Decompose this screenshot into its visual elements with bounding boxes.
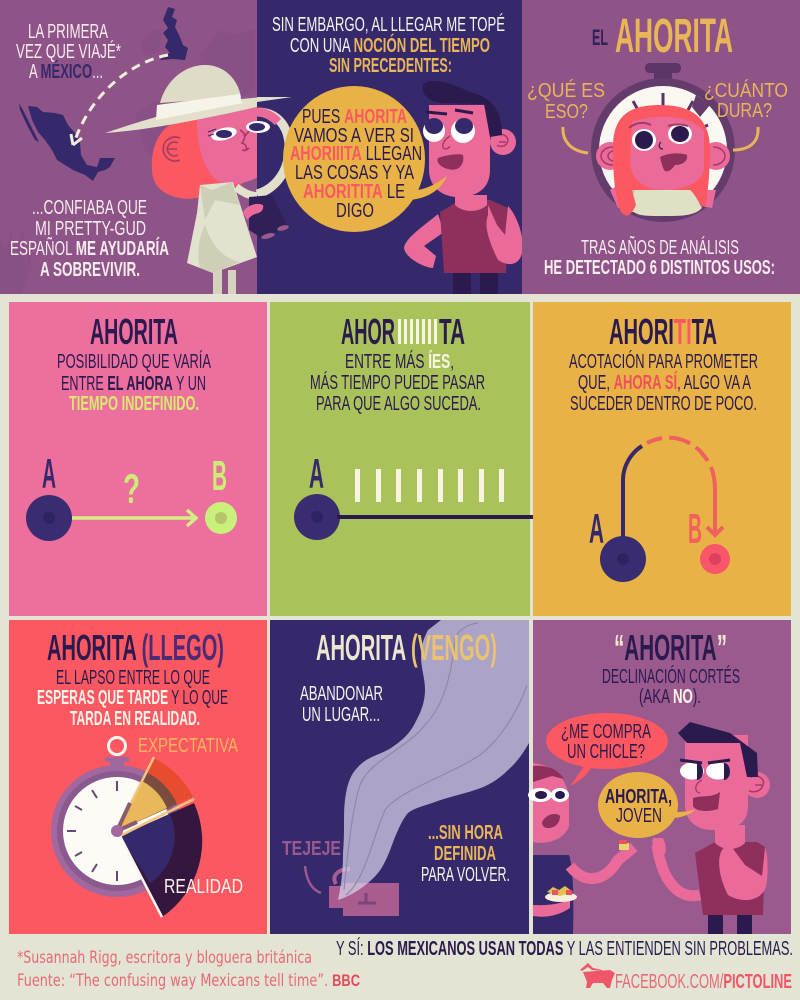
heading: AHORITITA	[609, 311, 717, 352]
text: definition	[602, 665, 740, 708]
text: definition: TARDA EN REALIDAD.	[70, 708, 200, 730]
text: definition: TIEMPO INDEFINIDO.	[69, 393, 199, 415]
diagram: loop	[589, 438, 730, 582]
panel: el ahorita	[522, 0, 800, 294]
speech bubble: PUES AHORITA	[302, 106, 407, 128]
heading: TA	[439, 311, 465, 352]
panel: first trip to Mexico	[0, 0, 292, 294]
arrow head	[71, 134, 82, 145]
title	[592, 10, 733, 63]
diagram: A to B: ?	[123, 465, 140, 512]
text: definition	[310, 350, 485, 415]
speech bubble: VAMOS A VER SI	[294, 125, 414, 147]
heading: AHOR	[341, 311, 395, 352]
panel: ahoritita	[533, 302, 791, 616]
text: questions	[527, 79, 788, 123]
panel: ahorita	[9, 302, 267, 616]
stopwatch portrait	[591, 63, 735, 222]
text: confiaba	[10, 197, 169, 281]
chart: stopwatch	[51, 738, 202, 917]
text: abandonar	[300, 683, 383, 726]
text: sin embargo: SIN PRECEDENTES:	[329, 55, 452, 77]
text: definition: MÁS TIEMPO PUEDE PASAR	[310, 371, 485, 394]
text: confiaba: MI PRETTY-GUD	[35, 218, 146, 240]
bubble strokes	[563, 127, 758, 153]
text: sin embargo	[272, 13, 505, 77]
text: sin hora	[421, 822, 510, 886]
heading: AHORITA	[90, 311, 178, 352]
text: tras años	[544, 235, 775, 279]
diagram: A to B: B	[212, 452, 227, 499]
text: sin embargo: CON UNA NOCIÓN DEL TIEMPO	[290, 33, 490, 57]
panel: sin embargo	[243, 0, 523, 294]
icon: map of Britain	[160, 7, 188, 60]
text: definition: PARA QUE ALGO SUCEDA.	[316, 393, 481, 415]
text: definition: POSIBILIDAD QUE VARÍA	[57, 350, 211, 373]
text: confiaba: A SOBREVIVIR.	[40, 259, 140, 281]
heading: AHORITA (LLEGO)	[47, 627, 224, 668]
panel: ahoriiiita	[270, 302, 533, 616]
diagram: loop: A	[589, 505, 604, 552]
panel: ahorita llego	[9, 620, 267, 934]
text: primera vez: VEZ QUE VIAJÉ*	[16, 40, 121, 63]
figure: explorer woman	[105, 65, 292, 294]
text: primera vez: LA PRIMERA	[28, 21, 108, 43]
text: primera vez	[16, 21, 121, 83]
heading: “AHORITA”	[614, 627, 727, 668]
text: abandonar: UN LUGAR...	[302, 704, 380, 726]
left character	[528, 763, 634, 934]
text: sin embargo: SIN EMBARGO, AL LLEGAR ME TOPÉ	[272, 13, 505, 36]
icon: pig logo	[580, 963, 615, 988]
title: EL	[592, 25, 608, 50]
smoke trail	[338, 620, 529, 900]
text: definition	[569, 350, 758, 415]
diagram: stretched line: A	[309, 450, 324, 497]
right character	[652, 722, 770, 934]
arrow: Britain to Mexico	[74, 55, 168, 143]
panel: ahorita vengo	[270, 620, 529, 934]
text: definition: EL LAPSO ENTRE LO QUE	[56, 667, 210, 689]
text: abandonar: ABANDONAR	[300, 683, 383, 705]
red speech bubble: ¿ME COMPRA	[561, 721, 651, 743]
diagram: A to B: A	[42, 450, 56, 497]
diagram: A to B	[26, 450, 237, 541]
icon: map of Mexico	[19, 103, 115, 181]
speech bubble: LAS COSAS Y YA	[295, 162, 414, 184]
footnote: credits	[17, 948, 360, 991]
yellow speech bubble: AHORITA,	[605, 786, 672, 808]
text: sin hora: PARA VOLVER.	[421, 864, 510, 886]
speech bubble: AHORITITA LE	[303, 181, 405, 203]
yellow speech bubble: JOVEN	[616, 805, 662, 827]
text: sin hora: ...SIN HORA	[428, 822, 503, 844]
text: definition: (AKA NO).	[639, 686, 701, 708]
text: questions: ¿QUÉ ES	[527, 79, 605, 102]
panel: declinacion cortes	[528, 620, 791, 934]
label: tejeje: TEJEJE	[282, 838, 341, 860]
stroke near suitcase	[305, 866, 321, 893]
speech bubble: AHORIIITA LLEGAN	[290, 143, 422, 165]
text: questions: DURA?	[717, 100, 772, 122]
magnifying glass and binoculars	[243, 97, 292, 240]
text: questions: ¿CUÁNTO	[704, 79, 788, 102]
suitcase	[329, 869, 399, 916]
text: confiaba: ESPAÑOL ME AYUDARÍA	[10, 236, 169, 260]
man character	[404, 81, 523, 294]
text: confiaba: ...CONFIABA QUE	[32, 197, 147, 219]
footnote: credits: *Susannah Rigg, escritora y bloguera británica	[17, 948, 312, 968]
red speech bubble	[546, 713, 668, 786]
text: definition: ENTRE EL AHORA Y UN	[61, 373, 206, 395]
text: definition: ENTRE MÁS ÍES,	[345, 350, 454, 373]
diagram: stretched line	[294, 450, 533, 540]
footnote: credits: Fuente: “The confusing way Mexicans tell time”. BBC	[17, 971, 360, 991]
text: primera vez: A MÉXICO...	[29, 60, 103, 83]
speech bubble: DIGO	[336, 200, 374, 222]
text: definition: QUE, AHORA SÍ, ALGO VA A	[578, 371, 751, 394]
heading: AHORITA (VENGO)	[316, 627, 497, 668]
text: definition	[57, 350, 211, 415]
yellow speech bubble	[598, 772, 696, 838]
red speech bubble: UN CHICLE?	[567, 741, 645, 763]
diagram: loop: B	[688, 505, 702, 552]
text: definition	[37, 667, 228, 730]
text: questions: ESO?	[545, 101, 588, 123]
text: definition: ESPERAS QUE TARDE Y LO QUE	[37, 687, 228, 709]
label: expectativa: EXPECTATIVA	[138, 735, 238, 757]
text: sin hora: DEFINIDA	[434, 843, 496, 865]
speech bubble	[283, 86, 447, 232]
label: realidad: REALIDAD	[164, 876, 243, 898]
